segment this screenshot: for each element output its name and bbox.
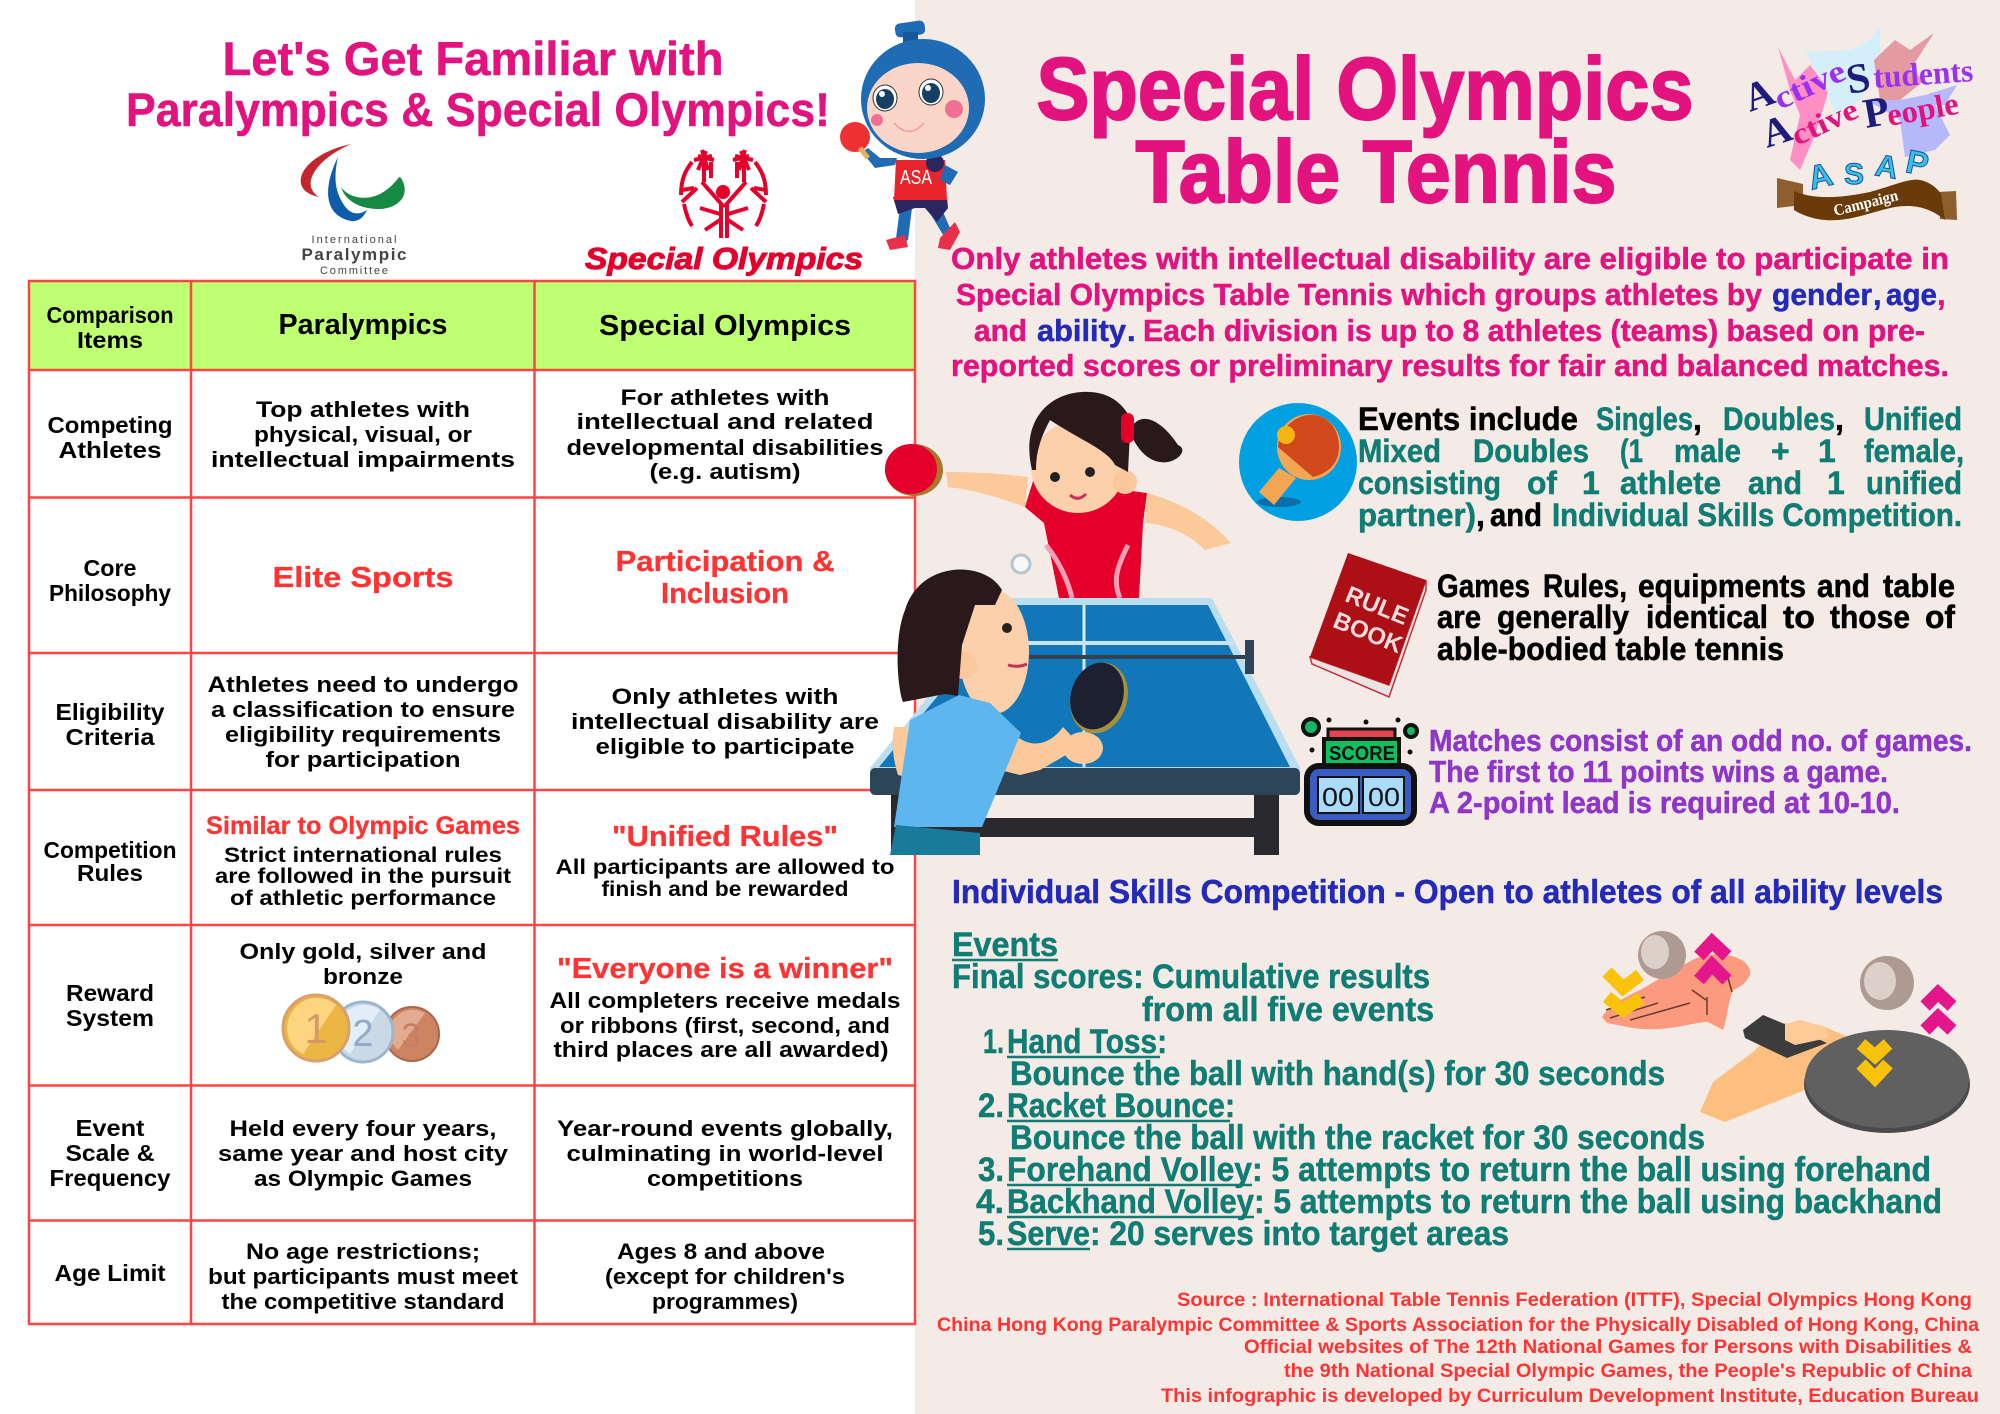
- left title: Let's Get Familiar with: [222, 32, 724, 85]
- logo: ASAP campaign: A: [1804, 155, 1836, 197]
- row: competition rules: Strict international rules: [224, 844, 502, 867]
- row: core philosophy: Participation &: [616, 546, 835, 578]
- row: eligibility criteria: Athletes need to undergo: [208, 672, 518, 697]
- logo: ASAP campaign: A: [1873, 147, 1901, 186]
- event 4: Backhand Volley: [1007, 1183, 1254, 1221]
- row: reward system: bronze: [323, 964, 403, 989]
- row: reward system: or ribbons (first, second, and: [560, 1013, 890, 1038]
- skills events list: Events: [952, 926, 1058, 964]
- row: event scale and frequency: as Olympic Games: [254, 1166, 472, 1191]
- row: reward system: [66, 939, 900, 1062]
- row: eligibility criteria: Eligibility: [56, 699, 165, 725]
- event 4: 4.: [976, 1183, 1004, 1221]
- event 5: 5.: [978, 1215, 1004, 1253]
- row: core philosophy: Philosophy: [49, 580, 171, 606]
- right title: Special Olympics: [1036, 39, 1694, 138]
- text: events include: consisting: [1358, 465, 1501, 501]
- text: match rules: The first to 11 points wins a game.: [1429, 754, 1888, 789]
- row: age limit: but participants must meet: [208, 1264, 519, 1289]
- event 1: Bounce the ball with hand(s) for 30 seconds: [1010, 1055, 1665, 1093]
- header row: [46, 302, 851, 353]
- event 1: [983, 1023, 1665, 1093]
- text: events include: unified: [1866, 465, 1962, 501]
- row: event scale and frequency: same year and host city: [218, 1141, 509, 1166]
- source credits: Source : International Table Tennis Federation (ITTF), Special Olympics Hong Kong: [1177, 1290, 1972, 1311]
- heading: individual skills competition: Individual Skills Competition - Open to athletes of all ability levels: [952, 873, 1943, 910]
- row: competition rules: Similar to Olympic Games: [206, 812, 520, 840]
- text: game rules: identical: [1646, 599, 1768, 635]
- row: competing athletes: (e.g. autism): [650, 459, 800, 484]
- logo: ASAP campaign: S: [1844, 158, 1864, 191]
- text: events include: and: [1748, 465, 1802, 501]
- row: eligibility criteria: eligible to participate: [596, 734, 854, 759]
- skills events list: [952, 926, 1942, 1253]
- intro paragraph: age: [1886, 277, 1937, 312]
- row: core philosophy: Core: [84, 555, 136, 581]
- player in red: [885, 392, 1231, 598]
- logo: Special Olympics: Special Olympics: [585, 241, 863, 276]
- intro paragraph: gender: [1772, 277, 1872, 312]
- event 1: Hand Toss:: [1007, 1023, 1167, 1061]
- source credits: the 9th National Special Olympic Games, the People's Republic of China: [1284, 1361, 1972, 1382]
- table header background: [29, 281, 915, 370]
- row: core philosophy: Elite Sports: [272, 562, 454, 594]
- row: competing athletes: Competing: [48, 412, 172, 438]
- text: events include: [1358, 401, 1964, 533]
- row: competing athletes: Top athletes with: [256, 397, 470, 422]
- intro paragraph: ,: [1873, 277, 1882, 312]
- row: competing athletes: developmental disabilities: [566, 435, 884, 460]
- row: event scale and frequency: Event: [76, 1115, 145, 1141]
- row: competition rules: "Unified Rules": [612, 821, 838, 853]
- silhouette figures: [1778, 25, 1957, 170]
- event 5: Serve: [1007, 1215, 1090, 1253]
- logo: International Paralympic Committee: Committee: [320, 265, 388, 277]
- text: game rules: [1437, 568, 1955, 667]
- logo: ASAP campaign: eople: [1884, 85, 1961, 133]
- event 2: 2.: [978, 1087, 1004, 1125]
- text: events include: male: [1674, 433, 1741, 469]
- text: game rules: equipments: [1638, 568, 1806, 604]
- row: event scale and frequency: Scale &: [66, 1140, 154, 1166]
- text: events include: Mixed: [1358, 433, 1441, 469]
- row: competing athletes: intellectual impairments: [211, 447, 515, 472]
- header row: Paralympics: [278, 309, 448, 341]
- text: events include: Doubles: [1473, 433, 1589, 469]
- row: age limit: the competitive standard: [222, 1289, 504, 1314]
- row: age limit: No age restrictions;: [246, 1239, 480, 1264]
- event 1: 1.: [983, 1023, 1004, 1061]
- text: game rules: table: [1883, 568, 1955, 604]
- intro paragraph: reported scores or preliminary results for fair and balanced matches.: [951, 348, 1949, 383]
- header row: Special Olympics: [599, 310, 851, 342]
- text: game rules: those: [1830, 599, 1910, 635]
- row: event scale and frequency: Frequency: [50, 1165, 171, 1191]
- intro paragraph: and: [974, 313, 1027, 348]
- left title: Paralympics & Special Olympics!: [126, 83, 830, 136]
- text: match rules: [1429, 723, 1972, 820]
- event 5: : 20 serves into target areas: [1090, 1215, 1509, 1253]
- event 3: [978, 1151, 1931, 1189]
- row: eligibility criteria: eligibility requirements: [225, 722, 501, 747]
- left title: [126, 32, 830, 136]
- row: event scale and frequency: culminating in world-level: [566, 1141, 884, 1166]
- logo: ASAP campaign: tudents: [1872, 52, 1974, 95]
- row: age limit: Age Limit: [54, 1260, 166, 1286]
- skills events list: from all five events: [1142, 991, 1434, 1029]
- text: events include: (1: [1620, 433, 1643, 469]
- text: events include: Doubles: [1723, 401, 1835, 437]
- icon: scoreboard: 00: [1368, 782, 1400, 812]
- row: reward system: "Everyone is a winner": [557, 953, 893, 985]
- icon: rule book: BOOK: [1329, 607, 1407, 659]
- text: events include: Singles: [1596, 401, 1693, 437]
- logo: ASAP campaign: ctive: [1768, 52, 1851, 116]
- icon: scoreboard: [1303, 718, 1417, 826]
- text: game rules: and: [1817, 568, 1870, 604]
- row: competition rules: are followed in the pursuit: [215, 865, 511, 888]
- row: competition rules: Competition: [44, 837, 176, 863]
- text: events include: and: [1490, 497, 1542, 533]
- row: eligibility criteria: Only athletes with: [612, 684, 838, 709]
- row: reward system: Reward: [66, 980, 154, 1006]
- text: events include: Individual Skills Competition.: [1552, 497, 1962, 533]
- logo: International Paralympic Committee: [301, 144, 406, 277]
- ribbon banner: Campaign: [1832, 187, 1900, 220]
- row: age limit: [54, 1239, 845, 1314]
- event 3: Forehand Volley: [1007, 1151, 1252, 1189]
- text: events include: athlete: [1620, 465, 1721, 501]
- intro paragraph: Each division is up to 8 athletes (teams) based on pre-: [1143, 313, 1925, 348]
- row: event scale and frequency: [50, 1115, 893, 1191]
- skills events list: Final scores: Cumulative results: [952, 958, 1430, 996]
- row: age limit: programmes): [652, 1289, 798, 1314]
- text: events include: partner): [1358, 497, 1476, 533]
- mascot: [840, 20, 985, 250]
- row: competing athletes: For athletes with: [620, 385, 830, 410]
- comparison table: [29, 281, 915, 1324]
- row: competing athletes: Athletes: [58, 437, 162, 463]
- logo: International Paralympic Committee: Paralympic: [302, 245, 406, 264]
- icon: paddle in blue circle: [1239, 403, 1357, 521]
- text: game rules: Games: [1437, 568, 1530, 604]
- logo: ASAP campaign: A: [1738, 68, 1780, 120]
- logo: Special Olympics: [585, 150, 863, 276]
- header row: Comparison: [46, 302, 174, 328]
- ball: [1012, 555, 1030, 573]
- logo: International Paralympic Committee: International: [312, 234, 396, 246]
- text: match rules: A 2-point lead is required at 10-10.: [1429, 785, 1900, 820]
- right title: Table Tennis: [1136, 122, 1616, 221]
- row: competing athletes: [48, 385, 884, 484]
- row: competition rules: of athletic performance: [230, 887, 496, 910]
- text: events include: Events include: [1358, 401, 1578, 437]
- row: reward system: All completers receive medals: [550, 988, 900, 1013]
- row: eligibility criteria: Criteria: [66, 724, 155, 750]
- table: [870, 598, 1300, 855]
- intro paragraph: Only athletes with intellectual disability are eligible to participate in: [951, 241, 1949, 276]
- icon: rule book: RULE: [1341, 581, 1412, 631]
- text: events include: 1: [1818, 433, 1836, 469]
- row: eligibility criteria: for participation: [266, 747, 460, 772]
- row: eligibility criteria: [56, 672, 879, 772]
- row: age limit: Ages 8 and above: [617, 1239, 825, 1264]
- source credits: [937, 1290, 1979, 1407]
- event 4: [976, 1183, 1942, 1221]
- mascot: ASA: [900, 167, 933, 189]
- icon: medals: 3: [402, 1017, 420, 1055]
- logo: ASAP campaign: P: [1860, 88, 1893, 138]
- event 2: Bounce the ball with the racket for 30 seconds: [1010, 1119, 1705, 1157]
- intro paragraph: .: [1127, 313, 1136, 348]
- player in blue: [890, 570, 1137, 855]
- right title: [1036, 39, 1694, 221]
- logo: ASAP campaign: ctive: [1786, 93, 1863, 152]
- text: game rules: of: [1925, 599, 1955, 635]
- row: age limit: (except for children's: [605, 1264, 845, 1289]
- event 2: [978, 1087, 1705, 1157]
- row: eligibility criteria: a classification to ensure: [211, 697, 515, 722]
- text: game rules: able-bodied table tennis: [1437, 631, 1784, 667]
- event 3: : 5 attempts to return the ball using forehand: [1252, 1151, 1931, 1189]
- logo: ASAP campaign: A: [1756, 105, 1797, 157]
- source credits: China Hong Kong Paralympic Committee & Sports Association for the Physically Disabled of Hong Kong, China: [937, 1315, 1979, 1336]
- text: events include: +: [1771, 433, 1790, 469]
- logo: ASAP campaign: P: [1903, 142, 1932, 183]
- row: eligibility criteria: intellectual disability are: [571, 709, 879, 734]
- icon: scoreboard: SCORE: [1329, 743, 1395, 765]
- row: core philosophy: Inclusion: [661, 578, 789, 610]
- icon: medals: 1: [304, 1005, 328, 1052]
- intro paragraph: ability: [1037, 313, 1127, 348]
- intro paragraph: [951, 241, 1949, 383]
- row: competing athletes: physical, visual, or: [254, 422, 472, 447]
- header row: Items: [77, 327, 143, 353]
- text: events include: 1: [1582, 465, 1600, 501]
- text: game rules: are: [1437, 599, 1481, 635]
- intro paragraph: ,: [1937, 277, 1946, 312]
- illustration: racket bounce: [1700, 956, 1970, 1133]
- source credits: This infographic is developed by Curriculum Development Institute, Education Bureau: [1161, 1386, 1979, 1407]
- text: game rules: Rules,: [1543, 568, 1627, 604]
- icon: medals: 2: [352, 1013, 374, 1055]
- event 4: : 5 attempts to return the ball using backhand: [1254, 1183, 1942, 1221]
- icon: rule book: [1310, 553, 1426, 697]
- illustration: table tennis players: [870, 392, 1300, 855]
- row: competition rules: [44, 812, 894, 910]
- row: competing athletes: intellectual and related: [576, 409, 874, 434]
- ribbon banner: [1777, 178, 1957, 220]
- text: events include: ,: [1476, 497, 1485, 533]
- row: event scale and frequency: Year-round events globally,: [557, 1116, 893, 1141]
- icon: medals: [283, 995, 439, 1062]
- icon: scoreboard: 00: [1322, 782, 1354, 812]
- row: competition rules: Rules: [77, 860, 143, 886]
- text: events include: female,: [1864, 433, 1964, 469]
- row: reward system: Only gold, silver and: [240, 939, 486, 964]
- event 3: 3.: [978, 1151, 1004, 1189]
- intro paragraph: Special Olympics Table Tennis which groups athletes by: [956, 277, 1763, 312]
- text: events include: 1: [1827, 465, 1845, 501]
- text: events include: ,: [1835, 401, 1844, 437]
- row: reward system: third places are all awarded): [554, 1037, 888, 1062]
- row: competition rules: finish and be rewarded: [602, 878, 848, 901]
- event 2: Racket Bounce:: [1007, 1087, 1235, 1125]
- logo: ASAP campaign: [1738, 25, 1974, 220]
- logo: ASAP campaign: S: [1843, 54, 1874, 104]
- source credits: Official websites of The 12th National Games for Persons with Disabilities &: [1244, 1337, 1972, 1358]
- row: competition rules: All participants are allowed to: [556, 856, 894, 879]
- row: event scale and frequency: Held every four years,: [230, 1116, 496, 1141]
- text: events include: Unified: [1864, 401, 1962, 437]
- row: reward system: System: [66, 1005, 154, 1031]
- illustration: hand toss: [1602, 931, 1750, 1030]
- text: events include: ,: [1693, 401, 1702, 437]
- row: event scale and frequency: competitions: [647, 1166, 803, 1191]
- text: game rules: generally: [1497, 599, 1629, 635]
- text: events include: of: [1527, 465, 1557, 501]
- text: game rules: to: [1783, 599, 1815, 635]
- row: core philosophy: [49, 546, 835, 610]
